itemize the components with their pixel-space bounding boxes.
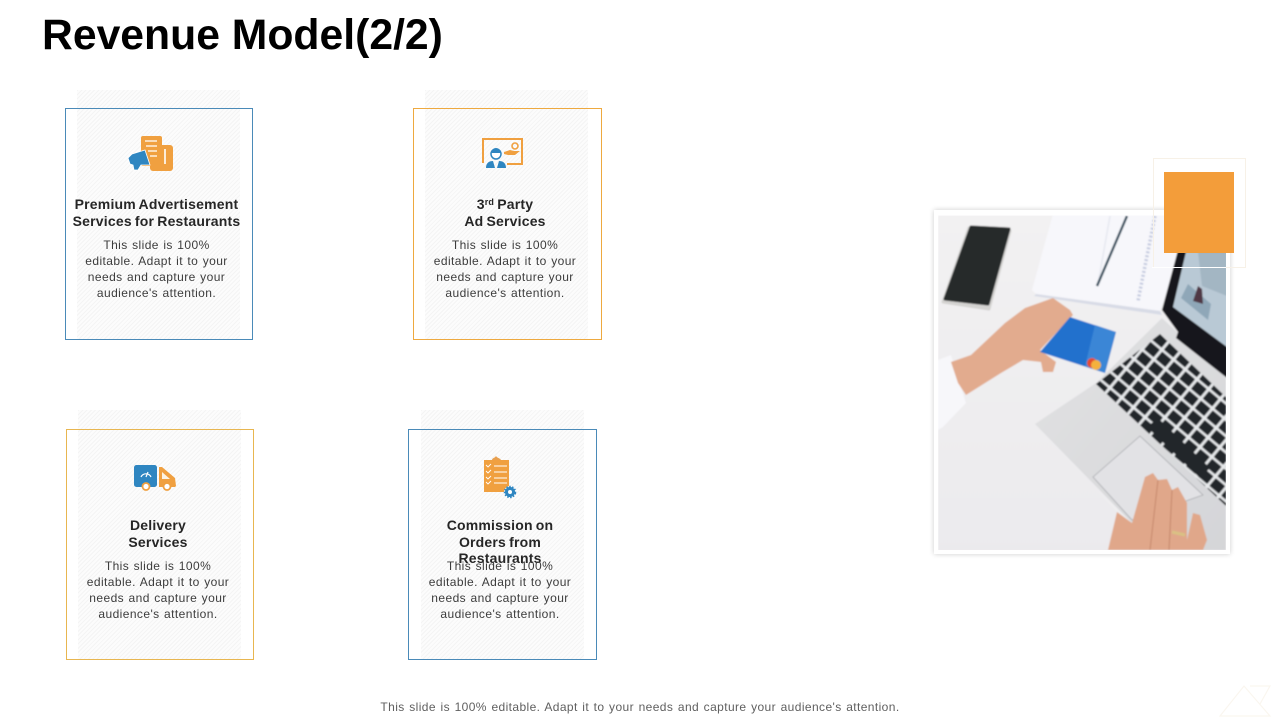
photo: hands paying by card at a laptop (934, 210, 1230, 554)
description: This slide is 100% (452, 238, 558, 252)
heading (447, 517, 553, 566)
laptop base (1035, 318, 1226, 550)
description: needs and capture your (88, 270, 225, 284)
right hand (1108, 473, 1207, 550)
icon: clipboard with gear (484, 456, 516, 498)
description (85, 238, 228, 300)
laptop screen (1162, 250, 1227, 378)
wedding ring (1172, 532, 1185, 535)
description: editable. Adapt it to your (87, 575, 229, 589)
phone (943, 228, 1010, 309)
heading: Ad Services (464, 212, 546, 228)
white line over photo (1152, 267, 1226, 268)
heading: Commission on (447, 517, 553, 533)
heading (464, 196, 546, 228)
panel: third party ad services (413, 90, 602, 340)
panel: premium advertisement (65, 90, 253, 340)
description: audience's attention. (445, 286, 565, 300)
heading: Restaurants (458, 550, 542, 566)
heading: Orders from (459, 534, 541, 550)
description: editable. Adapt it to your (434, 254, 576, 268)
corner logo mark (1219, 686, 1271, 716)
description (434, 238, 576, 300)
panel: delivery services (66, 410, 254, 660)
icon: delivery truck (134, 465, 176, 491)
credit card (1040, 317, 1116, 373)
icon: presenter board (482, 138, 523, 168)
heading: Services for Restaurants (73, 212, 240, 228)
decorative outline square (1153, 158, 1246, 268)
footer note: This slide is 100% editable. Adapt it to your needs and capture your audience's attention. (380, 700, 900, 714)
keyboard (1096, 334, 1226, 506)
description: This slide is 100% (447, 559, 553, 573)
description: needs and capture your (431, 591, 569, 605)
orange accent square (1164, 172, 1234, 253)
description: audience's attention. (97, 286, 216, 300)
description: audience's attention. (440, 607, 560, 621)
heading: Services (128, 534, 188, 550)
description: editable. Adapt it to your (85, 254, 228, 268)
heading: Premium Advertisement (75, 196, 238, 212)
space bar (1147, 418, 1210, 478)
description: This slide is 100% (103, 238, 210, 252)
shirt cuff (938, 355, 966, 430)
heading: Delivery (130, 517, 186, 533)
trackpad (1093, 436, 1203, 520)
description: needs and capture your (89, 591, 227, 605)
description: This slide is 100% (105, 559, 211, 573)
icon: megaphone and documents (128, 136, 173, 171)
heading: 3rd Party (477, 196, 533, 212)
title: Revenue Model(2/2) (42, 11, 443, 59)
panel: commission on orders (408, 410, 597, 660)
description: editable. Adapt it to your (429, 575, 571, 589)
heading (73, 196, 240, 228)
description (429, 559, 571, 621)
description: needs and capture your (436, 270, 574, 284)
notebook (1032, 214, 1186, 311)
description: audience's attention. (98, 607, 218, 621)
heading (128, 517, 188, 550)
description (87, 559, 229, 621)
left hand (951, 298, 1073, 395)
